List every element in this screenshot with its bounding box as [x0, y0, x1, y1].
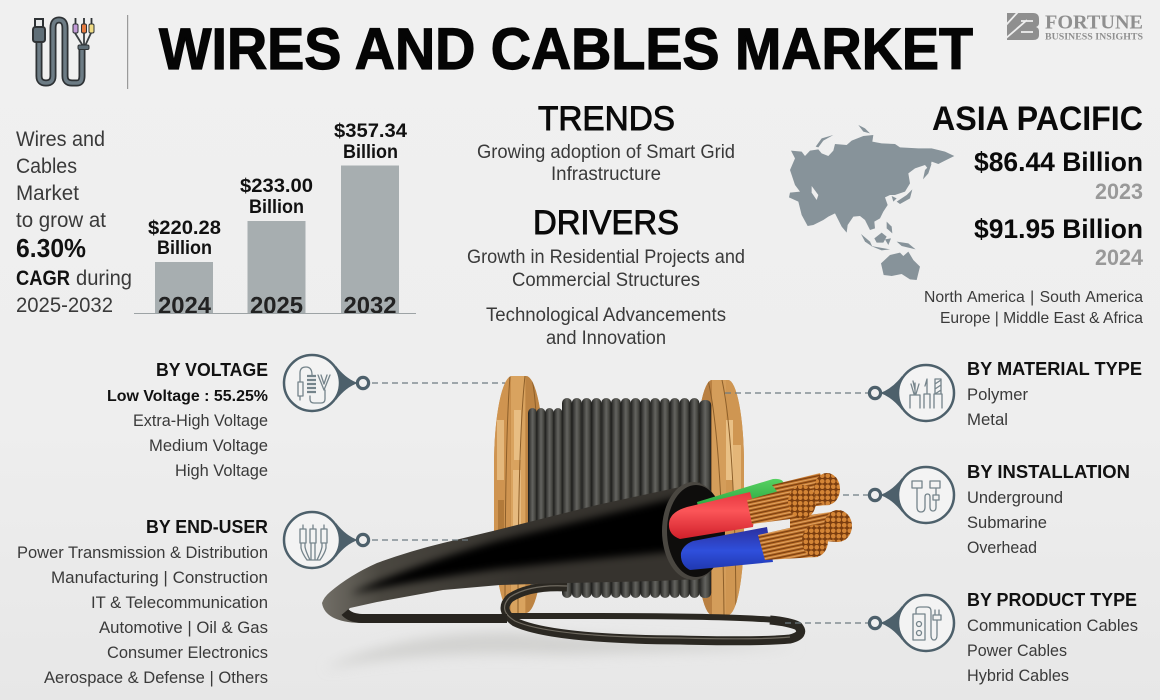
segment: by voltage: Low Voltage : 55.25% — [107, 388, 268, 405]
trends block: TRENDS — [538, 100, 675, 138]
logo: Fortune Business Insights: BUSINESS INSIGHTS — [1045, 32, 1143, 42]
bar: 2024: $220.28 — [148, 217, 221, 239]
segment: by product type: Communication Cables — [967, 616, 1138, 635]
regional summary: $86.44 Billion — [974, 147, 1143, 177]
icon: cable cross-sections — [910, 379, 942, 408]
cable illustration — [322, 376, 852, 668]
drivers block: Technological Advancements — [486, 305, 726, 326]
drivers block: Growth in Residential Projects and — [467, 247, 745, 268]
map: Asia Pacific — [789, 125, 954, 280]
segment: by end-user — [17, 516, 268, 687]
segment: by voltage: High Voltage — [175, 461, 268, 480]
connector: by product type — [785, 595, 954, 651]
icon: power strip — [913, 607, 941, 640]
header divider — [127, 15, 128, 89]
icon: connector cables — [912, 481, 940, 512]
blue conductor — [681, 527, 773, 570]
spool windings — [528, 398, 711, 598]
CAGR text block: during — [76, 267, 132, 290]
cable jacket — [322, 482, 700, 623]
segment: by end-user: Power Transmission & Distribution — [17, 543, 268, 562]
cable mouth — [662, 482, 725, 580]
drivers block: Commercial Structures — [512, 270, 700, 291]
segment: by voltage: BY VOLTAGE — [156, 359, 268, 380]
bar: 2025: $233.00 — [240, 175, 313, 197]
segment: by installation — [967, 461, 1130, 557]
bar: 2025 — [240, 175, 313, 320]
segment: by material type — [967, 358, 1142, 429]
CAGR text block: 6.30% — [16, 233, 86, 263]
chart baseline — [134, 313, 416, 314]
cable loop on floor — [505, 586, 801, 641]
drivers block: DRIVERS — [533, 204, 679, 242]
strands: rear lower — [790, 510, 852, 542]
CAGR text block: to grow at — [16, 209, 106, 232]
bar chart — [148, 120, 407, 320]
connector: by voltage — [284, 355, 505, 411]
segment: by installation: Overhead — [967, 538, 1037, 557]
segment: by voltage: Extra-High Voltage — [133, 411, 268, 430]
bar: 2024 — [148, 217, 221, 320]
segment: by material type: Polymer — [967, 385, 1028, 404]
regional summary: $91.95 Billion — [974, 214, 1143, 244]
title: WIRES AND CABLES MARKET — [159, 17, 973, 82]
segment: by voltage: Medium Voltage — [149, 436, 268, 455]
segment: by end-user: Automotive | Oil & Gas — [99, 618, 268, 637]
segment: by end-user: Manufacturing | Construction — [51, 568, 268, 587]
regional summary: ASIA PACIFIC — [932, 100, 1143, 138]
strands: rear upper — [772, 473, 840, 508]
bar: 2024: Billion — [157, 237, 212, 259]
bar: 2032 — [334, 120, 407, 320]
regional summary — [924, 100, 1144, 327]
icon: coiled cable — [298, 367, 330, 403]
icon: RCA plugs — [300, 525, 327, 560]
CAGR text block: Wires and — [16, 128, 105, 151]
segment: by material type: Metal — [967, 410, 1008, 429]
connector: by material type — [725, 365, 954, 421]
logo: Fortune Business Insights: FORTUNE — [1045, 11, 1143, 33]
segment: by end-user: IT & Telecommunication — [91, 593, 268, 612]
CAGR text block: Market — [16, 182, 79, 205]
bar: 2025: 2025 — [250, 292, 303, 320]
drivers block — [467, 204, 745, 349]
segment: by installation: Submarine — [967, 513, 1047, 532]
segment: by installation: Underground — [967, 488, 1063, 507]
segment: by end-user: BY END-USER — [146, 516, 268, 537]
segment: by installation: BY INSTALLATION — [967, 461, 1130, 482]
spool right flange — [696, 380, 744, 615]
CAGR text block: Cables — [16, 155, 77, 178]
CAGR text block: CAGR — [16, 267, 70, 290]
bar: 2024: 2024 — [158, 292, 212, 320]
header icon: cables — [33, 18, 94, 83]
strands: blue conductor — [758, 524, 828, 560]
segment: by product type: Power Cables — [967, 641, 1067, 660]
green conductor — [697, 479, 784, 515]
connector: by installation — [843, 467, 954, 523]
CAGR text block: 2025-2032 — [16, 294, 113, 317]
regional summary: Europe | Middle East & Africa — [940, 310, 1143, 327]
CAGR text block — [16, 128, 132, 317]
bar: 2032: $357.34 — [334, 120, 407, 142]
segment: by product type: Hybrid Cables — [967, 666, 1069, 685]
bar: 2032: 2032 — [344, 292, 396, 320]
segment: by voltage — [107, 359, 268, 480]
regional summary: 2023 — [1095, 179, 1143, 204]
segment: by product type: BY PRODUCT TYPE — [967, 589, 1137, 610]
logo: Fortune Business Insights — [1005, 11, 1143, 42]
trends block: Infrastructure — [551, 164, 661, 185]
regional summary: 2024 — [1095, 245, 1144, 270]
trends block — [477, 100, 735, 185]
segment: by end-user: Aerospace & Defense | Others — [44, 668, 268, 687]
connector: by end-user — [284, 512, 470, 568]
strands: red conductor — [747, 485, 816, 524]
segment: by product type — [967, 589, 1138, 685]
segment: by end-user: Consumer Electronics — [107, 643, 268, 662]
drivers block: and Innovation — [546, 328, 666, 349]
trends block: Growing adoption of Smart Grid — [477, 142, 735, 163]
segment: by material type: BY MATERIAL TYPE — [967, 358, 1142, 379]
regional summary: North America | South America — [924, 289, 1143, 306]
bar: 2032: Billion — [343, 141, 398, 163]
red conductor — [669, 492, 754, 539]
bar: 2025: Billion — [249, 196, 304, 218]
spool left flange — [494, 376, 544, 613]
